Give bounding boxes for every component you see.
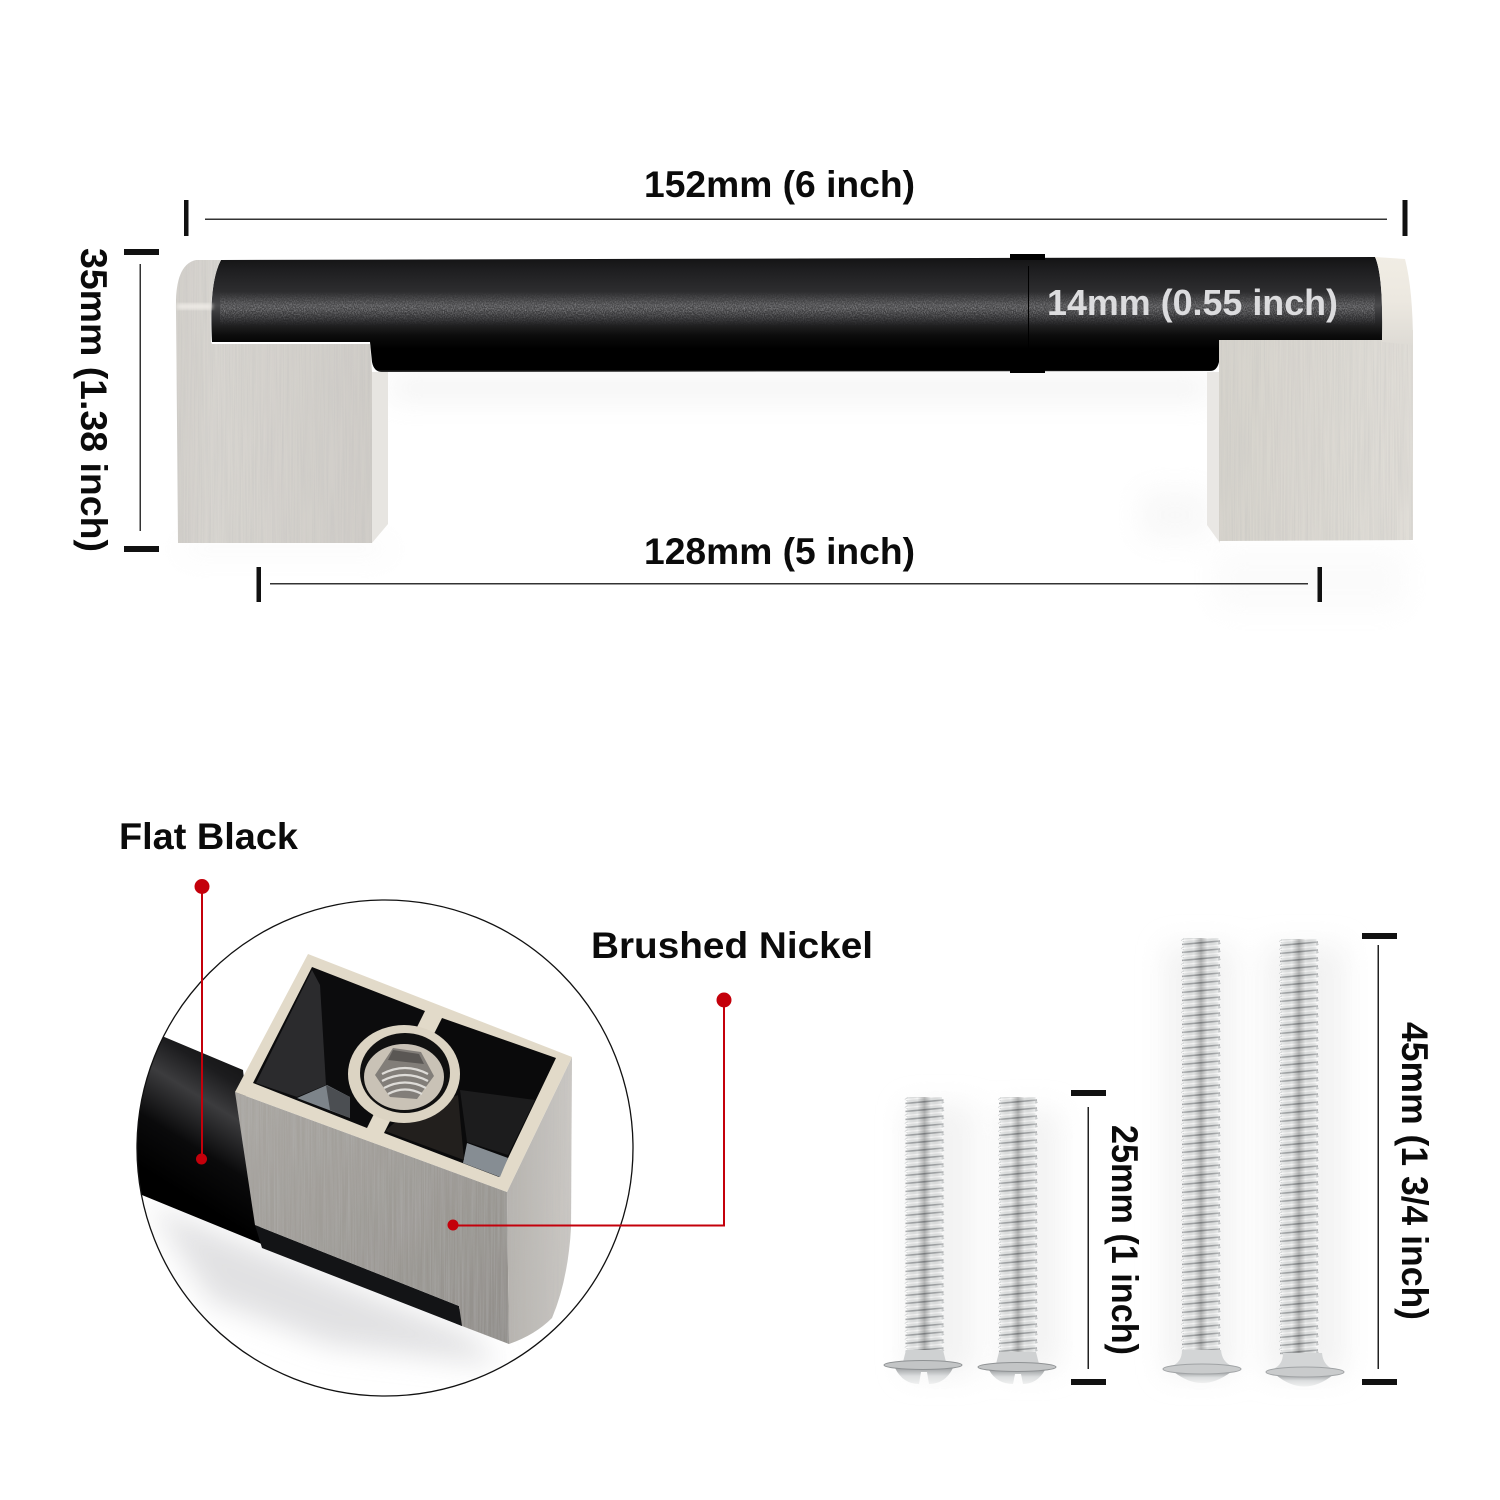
screw: short 1 [884,1097,962,1384]
hex nut [375,1048,434,1099]
circle photo content [120,954,572,1365]
dimension line [1071,1090,1106,1385]
bolt threads [382,1068,428,1094]
screw: long 1 [1163,938,1241,1383]
dimension line [1010,254,1045,373]
washer [364,1044,444,1110]
soft shadows under handle [180,376,1405,610]
dimension: long screw 45mm [1362,933,1435,1385]
rotated label: 45mm (1 3/4 inch) [1394,1022,1435,1320]
right cavity [384,1018,556,1177]
left cavity [253,967,425,1128]
dimension line [184,200,1408,236]
block side face [507,1057,572,1344]
heading: Flat Black: Flat Black [119,816,298,857]
left post highlight [177,304,212,309]
product photo: handle [176,257,1413,610]
black bar [138,1036,462,1326]
dimension: overall length 152mm [184,164,1408,236]
black bar [211,257,1382,372]
block front face [235,1092,509,1344]
rotated label: 35mm (1.38 inch) [73,248,114,552]
label: 152mm (6 inch) [644,164,915,205]
right post side face [1207,372,1220,543]
dimension: short screw 25mm [1071,1090,1145,1385]
label: 14mm (0.55 inch) [1047,282,1338,323]
cavity wall shading [256,970,535,1177]
screw: long 2 [1266,939,1344,1386]
bar lower strip [255,1225,462,1326]
callout: flat black pointer [194,879,210,1164]
dimension line [124,249,159,552]
right post [1219,330,1413,541]
screw: short 2 [978,1097,1056,1384]
dimension: bar diameter 14mm [1010,254,1338,373]
boss ring [348,1025,460,1123]
circular detail view [120,900,633,1396]
circle outline [137,900,633,1396]
left post side face [370,372,388,543]
dimension: hole spacing 128mm [256,531,1322,602]
rotated label: 25mm (1 inch) [1104,1125,1145,1355]
hex nut top facet [388,1050,424,1064]
label: 128mm (5 inch) [644,531,915,572]
dimension line [256,567,1322,602]
callout: brushed nickel pointer [448,992,732,1230]
table shadow [150,1205,500,1365]
soft backdrop behind screws [905,945,1345,1375]
boss interior [360,1033,450,1113]
top frame [235,954,572,1192]
heading: Brushed Nickel: Brushed Nickel [591,925,873,966]
dimension: height 35mm [73,248,159,552]
dimension line [1362,933,1397,1385]
left post [176,260,372,543]
right post cap [1375,257,1413,345]
